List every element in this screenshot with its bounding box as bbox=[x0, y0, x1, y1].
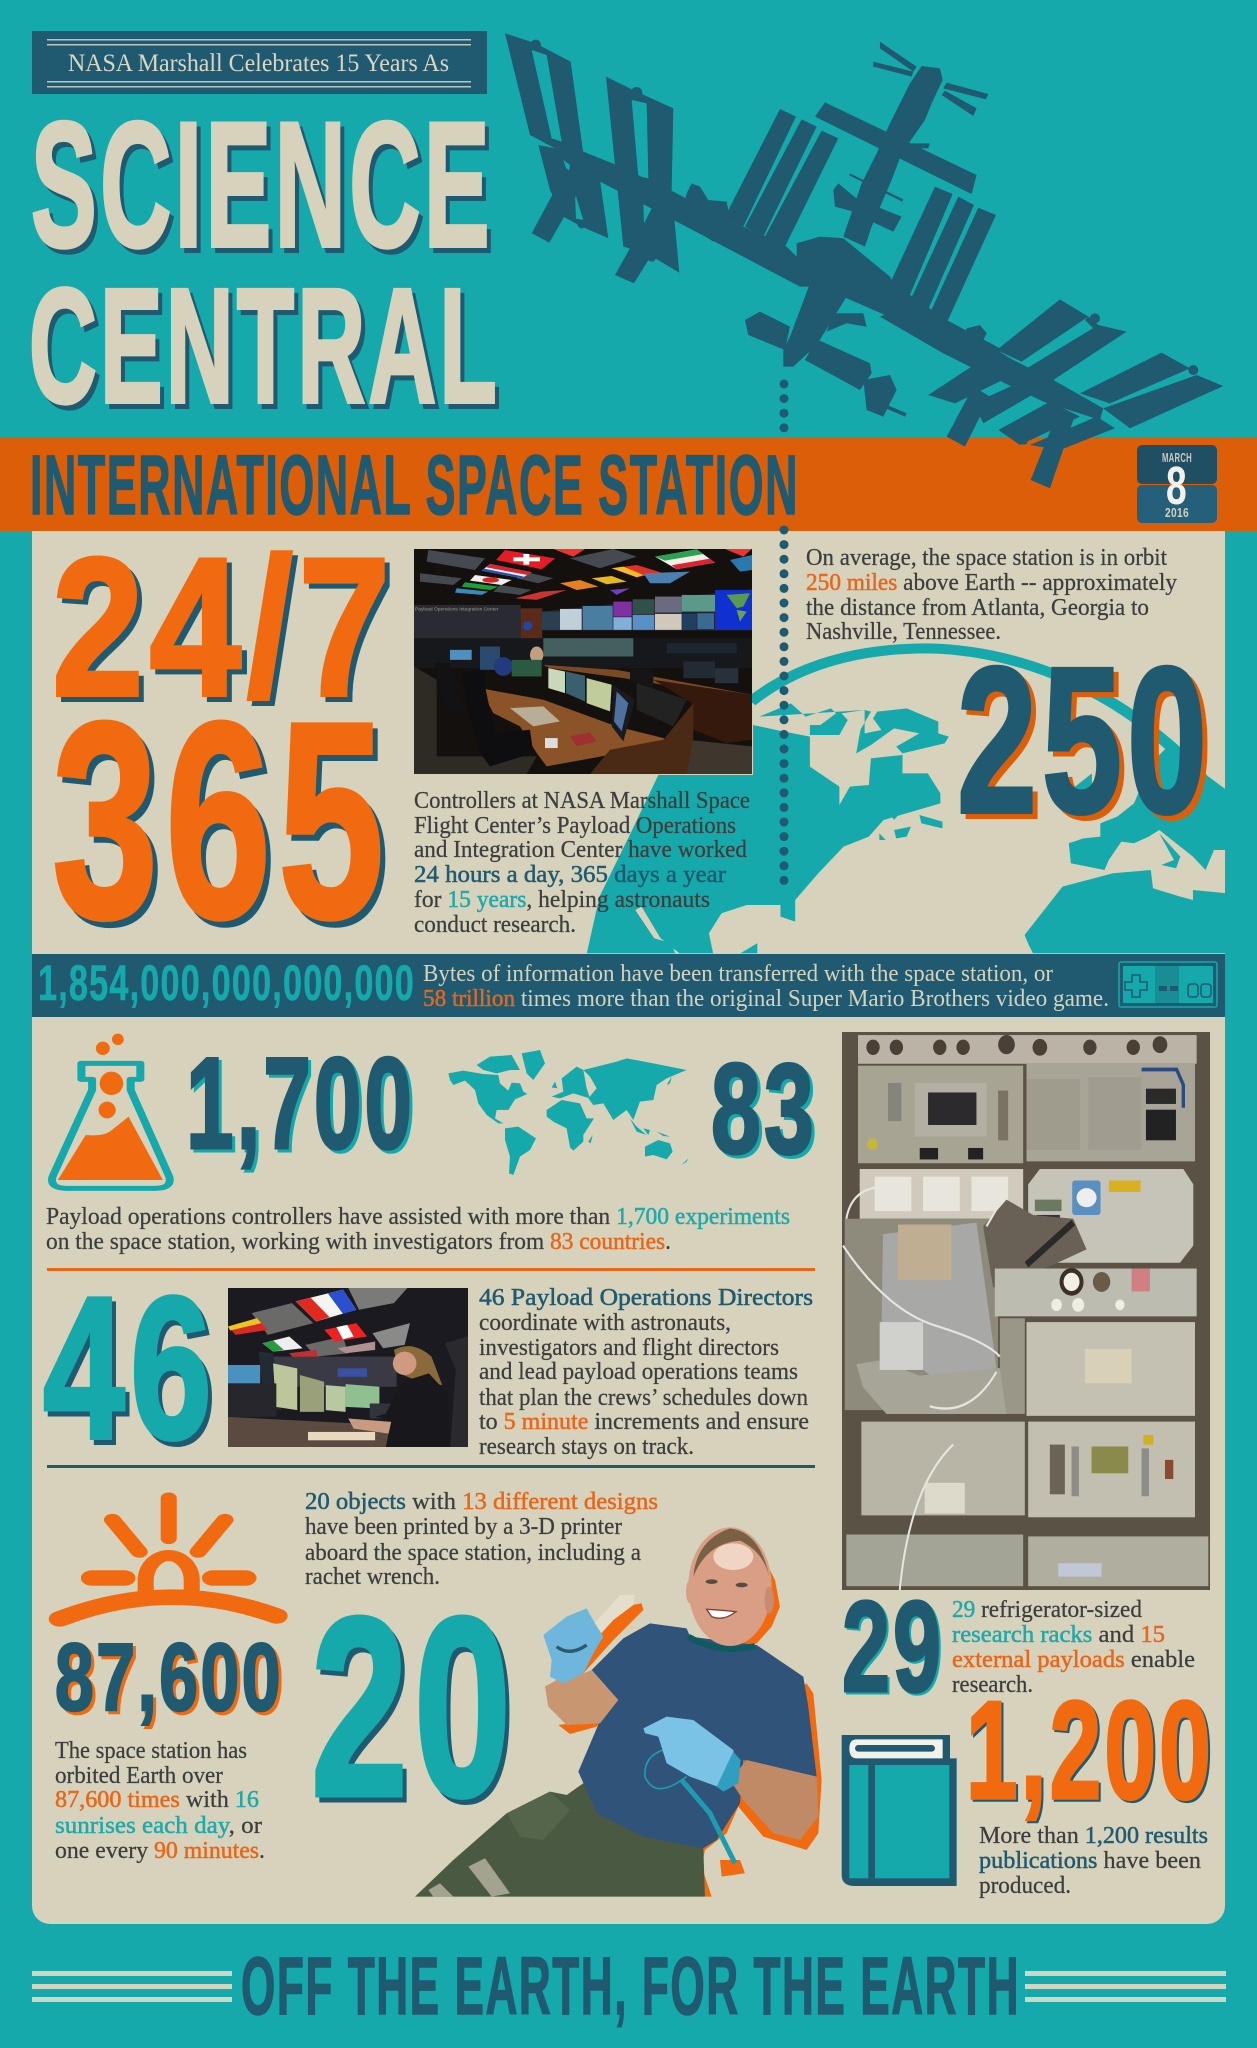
title: science bbox=[31, 85, 497, 289]
paragraph: 3-D printing bbox=[305, 1489, 658, 1590]
paragraph: 3-D printing: have been printed by a 3-D printer bbox=[305, 1514, 622, 1540]
dotted altitude line bbox=[780, 384, 788, 882]
paragraph: research racks: external payloads enable bbox=[952, 1647, 1195, 1673]
paragraph: directors: and lead payload operations teams bbox=[479, 1359, 798, 1385]
date badge: MARCH bbox=[1162, 450, 1192, 465]
ISS silhouette bbox=[505, 33, 1223, 488]
paragraph: research racks: research racks and 15 bbox=[952, 1622, 1165, 1648]
paragraph: controllers: 24 hours a day, 365 days a year bbox=[414, 862, 726, 888]
orange title band bbox=[0, 437, 1257, 531]
title: science: SCIENCE bbox=[35, 90, 497, 289]
paragraph: directors bbox=[479, 1285, 813, 1460]
stat: 20 bbox=[311, 1565, 521, 1855]
paragraph: 3-D printing: 20 objects with 13 different designs bbox=[305, 1489, 658, 1515]
paragraph: controllers: conduct research. bbox=[414, 912, 576, 938]
stat: 29: 29 bbox=[844, 1577, 946, 1721]
paragraph: publications: More than 1,200 results bbox=[979, 1823, 1208, 1849]
stat: 1,700 bbox=[186, 1030, 418, 1179]
cream main panel bbox=[32, 531, 1225, 1924]
stat: 24/7: 24/7 bbox=[52, 517, 396, 737]
paragraph: research racks: research. bbox=[952, 1672, 1033, 1698]
icon: game controller bbox=[1119, 962, 1217, 1007]
paragraph: 3-D printing: rachet wrench. bbox=[305, 1564, 440, 1590]
stat: 87,600: 87,600 bbox=[55, 1624, 283, 1731]
paragraph: controllers: Controllers at NASA Marshall Space bbox=[414, 788, 750, 814]
paragraph: publications bbox=[979, 1823, 1208, 1899]
title: central: CENTRAL bbox=[33, 259, 504, 442]
paragraph: controllers: for 15 years, helping astronauts bbox=[414, 887, 710, 913]
paragraph: publications: produced. bbox=[979, 1873, 1071, 1899]
paragraph: controllers: Flight Center’s Payload Operations bbox=[414, 813, 736, 839]
paragraph: orbits: one every 90 minutes. bbox=[55, 1838, 265, 1864]
bytes caption bbox=[423, 961, 1109, 1012]
paragraph: orbit distance: 250 miles above Earth -- approximately bbox=[806, 570, 1177, 596]
paragraph: experiments: Payload operations controllers have assisted with more than 1,700 experiments bbox=[46, 1204, 790, 1230]
paragraph: directors: that plan the crews’ schedules down bbox=[479, 1385, 808, 1411]
paragraph: directors: coordinate with astronauts, bbox=[479, 1310, 731, 1336]
icon: flask bbox=[52, 1034, 170, 1188]
paragraph: controllers bbox=[414, 788, 750, 938]
stat: 20: 20 bbox=[311, 1565, 517, 1850]
paragraph: orbits bbox=[55, 1738, 265, 1864]
paragraph: orbits: The space station has bbox=[55, 1738, 247, 1764]
paragraph: orbit distance: Nashville, Tennessee. bbox=[806, 619, 1001, 645]
stat: 29: 29 bbox=[842, 1575, 944, 1719]
stat: 365 bbox=[52, 665, 396, 983]
paragraph: directors: investigators and flight directors bbox=[479, 1335, 779, 1361]
header ribbon bbox=[32, 31, 487, 94]
paragraph: directors: to 5 minute increments and ensure bbox=[479, 1409, 809, 1435]
photo: control room bbox=[414, 549, 752, 774]
world map bbox=[448, 1050, 688, 1175]
title: science: SCIENCE bbox=[31, 85, 493, 284]
photo: control room: Payload Operations Integration Center bbox=[415, 607, 499, 612]
stat: 87,600: 87,600 bbox=[58, 1627, 286, 1734]
title: central bbox=[29, 254, 504, 442]
stat: 365: 365 bbox=[52, 665, 391, 977]
stat: 46: 46 bbox=[43, 1255, 217, 1482]
stat: 1,700: 1,700 bbox=[189, 1033, 418, 1179]
paragraph: controllers: and Integration Center have worked bbox=[414, 837, 747, 863]
paragraph: research racks: 29 refrigerator-sized bbox=[952, 1597, 1142, 1623]
date badge: 8 bbox=[1166, 456, 1188, 516]
paragraph: experiments: on the space station, working with investigators from 83 countries. bbox=[46, 1229, 671, 1255]
stat: 20: 20 bbox=[315, 1570, 521, 1855]
stat: 83: 83 bbox=[714, 1041, 820, 1184]
header ribbon: NASA Marshall Celebrates 15 Years As bbox=[68, 50, 449, 77]
title: central: CENTRAL bbox=[29, 254, 500, 437]
date badge: 2016 bbox=[1165, 505, 1189, 520]
paragraph: publications: publications have been bbox=[979, 1848, 1201, 1874]
paragraph: orbit distance: the distance from Atlanta, Georgia to bbox=[806, 595, 1149, 621]
stat: 46: 46 bbox=[47, 1260, 221, 1487]
paragraph: 3-D printing: aboard the space station, including a bbox=[305, 1540, 641, 1566]
stat: 83: 83 bbox=[711, 1038, 817, 1181]
stat: 24/7: 24/7 bbox=[57, 522, 401, 742]
photo: payload director bbox=[228, 1288, 468, 1447]
paragraph: orbits: 87,600 times with 16 bbox=[55, 1787, 259, 1813]
earth illustration bbox=[587, 648, 1227, 953]
paragraph: research racks bbox=[952, 1597, 1195, 1698]
stat: 365: 365 bbox=[57, 671, 396, 983]
icon: sunrise bbox=[60, 1498, 276, 1619]
bytes caption: 58 trillion times more than the original Super Mario Brothers video game. bbox=[423, 986, 1109, 1012]
photo: experiment rack bbox=[842, 1032, 1210, 1590]
stat: 29 bbox=[842, 1575, 946, 1721]
paragraph: orbits: sunrises each day , or bbox=[55, 1813, 262, 1839]
bytes number: 1,854,000,000,000,000 bbox=[38, 955, 415, 1011]
data bar bbox=[32, 954, 1225, 1017]
paragraph: directors: 46 Payload Operations Directors bbox=[479, 1285, 813, 1311]
stat: 1,700: 1,700 bbox=[186, 1030, 415, 1176]
icon: book bbox=[842, 1735, 957, 1886]
date badge bbox=[1137, 445, 1217, 523]
bytes caption: Bytes of information have been transferred with the space station, or bbox=[423, 961, 1053, 987]
paragraph: experiments bbox=[46, 1204, 790, 1255]
paragraph: directors: research stays on track. bbox=[479, 1434, 694, 1460]
photo: astronaut with printed wrench bbox=[415, 1527, 822, 1897]
paragraph: orbit distance bbox=[806, 545, 1177, 645]
paragraph: orbit distance: On average, the space station is in orbit bbox=[806, 545, 1167, 571]
paragraph: orbits: orbited Earth over bbox=[55, 1763, 223, 1789]
